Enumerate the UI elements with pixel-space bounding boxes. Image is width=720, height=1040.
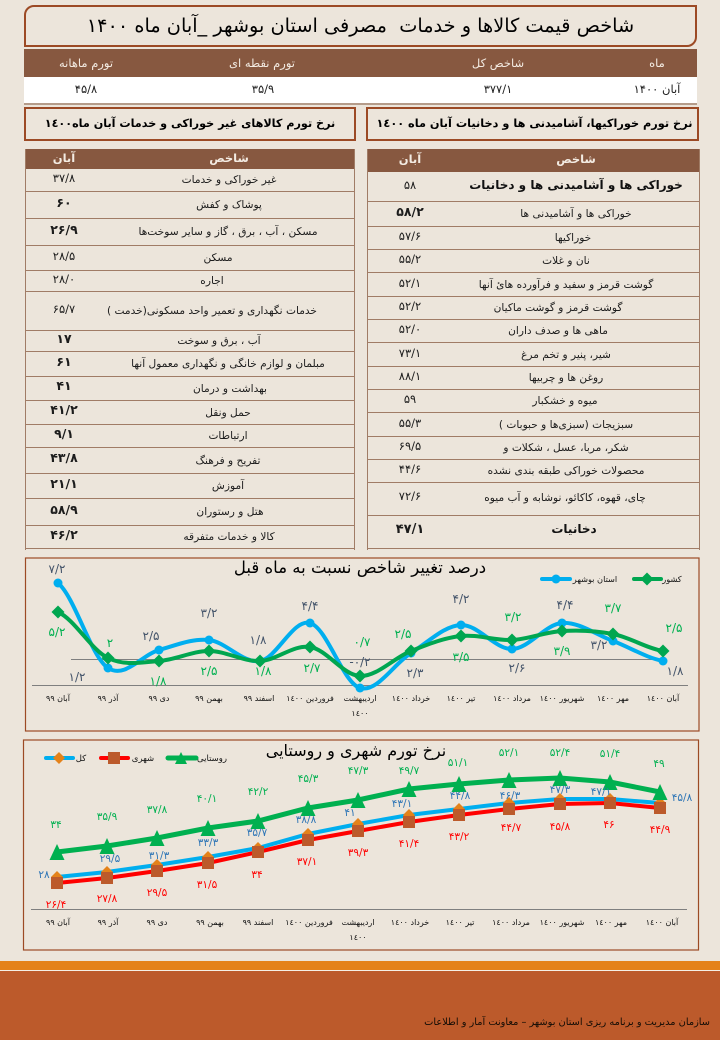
data labels: country: ۳/۲ — [505, 610, 521, 624]
row: محصولات خوراکی طبقه بندی نشده — [488, 465, 644, 477]
row: ۴۴/۶ — [399, 462, 421, 476]
row — [26, 499, 354, 526]
axis labels: chart 1: فروردین ۱٤۰۰ — [286, 694, 334, 703]
data labels: urban: ۴۳/۲ — [449, 831, 470, 843]
axis labels: chart 1: آذر ۹۹ — [98, 693, 119, 703]
row: مسکن — [203, 252, 233, 264]
data labels: country: ۳/۵ — [453, 650, 469, 664]
data labels: urban: ۳۱/۵ — [197, 879, 218, 891]
row — [368, 437, 699, 460]
data labels: country: ۲/۷ — [304, 661, 321, 675]
panel: summary table — [24, 49, 697, 105]
row — [26, 401, 354, 425]
summary table header: ماه — [649, 56, 665, 70]
row — [26, 526, 354, 549]
row — [368, 250, 699, 273]
data labels: total — [38, 784, 693, 881]
row — [26, 219, 354, 246]
series: country — [52, 606, 670, 682]
data labels: rural: ۵۲/۴ — [550, 747, 570, 759]
row: ماهی ها و صدف داران — [508, 325, 608, 337]
summary table values: ۴۵/۸ — [75, 82, 97, 96]
row: خدمات نگهداری و تعمیر واحد مسکونی(خدمت ) — [107, 305, 317, 317]
data labels: rural: ۳۷/۸ — [147, 804, 168, 816]
row: خوراکی ها و آشامیدنی ها و دخانیات — [469, 178, 683, 192]
row: ۵۲/۰ — [399, 322, 421, 336]
table header: شاخص — [556, 152, 596, 166]
row: ۵۸ — [404, 178, 416, 192]
row — [26, 271, 354, 292]
data labels: urban: ۴۴/۹ — [650, 824, 671, 836]
data labels: urban: ۳۹/۳ — [348, 847, 369, 859]
heading: non-food inflation — [24, 107, 356, 141]
row — [26, 192, 354, 219]
data labels: total: ۳۳/۳ — [198, 837, 219, 849]
summary table header — [24, 49, 697, 77]
row: ۶۵/۷ — [53, 302, 75, 316]
row: ۵۸/۹ — [50, 502, 78, 517]
row — [368, 390, 699, 413]
row: شیر، پنیر و تخم مرغ — [521, 349, 611, 361]
row — [368, 297, 699, 320]
row: ۲۸/۵ — [53, 249, 75, 263]
heading: food inflation — [366, 107, 699, 141]
axis labels: chart 1: دی ۹۹ — [149, 694, 170, 703]
axis labels: chart 2 — [46, 917, 679, 942]
axis labels: chart 1: شهریور ۱٤۰۰ — [540, 694, 585, 703]
legend: chart 2: روستایی — [197, 754, 227, 764]
row: ۴۱ — [56, 378, 72, 393]
summary table values — [75, 82, 681, 96]
markers: total — [51, 793, 666, 883]
row — [26, 246, 354, 271]
row: میوه و خشکبار — [532, 395, 598, 407]
row: ۶۹/۵ — [399, 439, 421, 453]
axis labels: chart 1: تیر ۱٤۰۰ — [447, 694, 475, 703]
axis labels: chart 1: مرداد ۱٤۰۰ — [493, 694, 531, 703]
data labels: Bushehr: ۴/۲ — [453, 592, 469, 606]
legend: chart 2 — [46, 752, 227, 764]
series: Bushehr province — [54, 578, 668, 692]
axis labels: chart 2: مرداد ۱٤۰۰ — [492, 918, 530, 927]
axis labels: chart 1: آبان ۹۹ — [46, 693, 71, 703]
data labels: country: ۲/۵ — [666, 621, 682, 635]
row: بهداشت و درمان — [193, 383, 267, 395]
row: خوراکیها — [555, 232, 591, 244]
title — [24, 5, 697, 47]
row: سبزیجات (سبزی‌ها و حبوبات ) — [499, 419, 633, 431]
data labels: country: ۱/۸ — [255, 664, 272, 678]
panel: non-food table — [25, 149, 355, 550]
table header: شاخص — [209, 151, 249, 165]
row — [368, 343, 699, 367]
row: ۶۱ — [56, 354, 72, 369]
data labels: total: ۴۷/۳ — [550, 784, 571, 796]
data labels: urban — [46, 819, 671, 911]
row — [26, 331, 354, 352]
legend: chart 1 — [542, 572, 682, 586]
axis labels: chart 1: آبان ۱٤۰۰ — [647, 693, 680, 703]
row: آموزش — [212, 480, 244, 492]
summary table values: ۳۷۷/۱ — [484, 82, 512, 96]
data labels: rural: ۴۹ — [653, 758, 665, 770]
summary table header: تورم ماهانه — [59, 56, 113, 70]
row: تفریح و فرهنگ — [196, 455, 260, 467]
summary table values: آبان ۱۴۰۰ — [634, 82, 680, 96]
axis labels: chart 2: آبان ۹۹ — [46, 917, 71, 927]
markers: urban — [51, 797, 666, 889]
axis labels: chart 2: بهمن ۹۹ — [196, 918, 224, 927]
row: روغن ها و چربیها — [529, 372, 603, 384]
row — [26, 292, 354, 331]
data labels: rural: ۳۵/۹ — [97, 811, 118, 823]
title: شاخص قیمت کالاها و خدمات مصرفی استان بوشهر _آبان ماه ۱۴۰۰ — [87, 14, 634, 37]
data labels: rural: ۵۲/۱ — [499, 747, 519, 759]
row: آب ، برق و سوخت — [177, 335, 261, 347]
data labels: total: ۳۱/۳ — [149, 850, 170, 862]
row: ۸۸/۱ — [399, 369, 421, 383]
data labels: urban: ۲۷/۸ — [97, 893, 118, 905]
data labels: Bushehr: ۷/۲ — [49, 562, 65, 576]
legend: chart 1: کشور — [661, 574, 682, 584]
summary table values: ۳۵/۹ — [252, 82, 274, 96]
axis labels: chart 1 — [46, 693, 680, 718]
data labels: country: ۲/۵ — [395, 627, 411, 641]
data labels: rural: ۴۲/۲ — [248, 786, 269, 798]
row — [26, 377, 354, 401]
data labels: urban: ۳۷/۱ — [297, 856, 317, 868]
row: ۷۳/۱ — [399, 346, 421, 360]
data labels: urban: ۴۶ — [603, 819, 615, 831]
row — [368, 227, 699, 250]
series: rural — [57, 778, 660, 852]
row: ۷۲/۶ — [399, 489, 421, 503]
data labels: rural: ۴۵/۳ — [298, 773, 319, 785]
data labels: Bushehr: ۴/۴ — [557, 598, 573, 612]
data labels: total: ۴۷/۱ — [591, 786, 611, 798]
row: ۹/۱ — [54, 426, 74, 441]
data labels: Bushehr: ۴/۴ — [302, 599, 318, 613]
table header: آبان — [399, 152, 421, 166]
row: ۵۸/۲ — [396, 204, 424, 219]
row: کالا و خدمات متفرقه — [183, 531, 275, 543]
row: ۴۳/۸ — [50, 450, 78, 465]
table header — [26, 149, 354, 169]
axis labels: chart 2: فروردین ۱٤۰۰ — [285, 918, 333, 927]
data labels: Bushehr: ۲/۶ — [509, 661, 525, 675]
row: ۵۲/۱ — [399, 276, 421, 290]
data labels: Bushehr: ۱/۸ — [250, 633, 267, 647]
data labels: country: ۲/۵ — [201, 664, 217, 678]
data labels: total: ۲۹/۵ — [100, 853, 121, 865]
row: شکر، مربا، عسل ، شکلات و — [503, 442, 629, 454]
heading: non-food inflation: نرخ تورم کالاهای غیر خوراکی و خدمات آبان ماه١٤٠٠ — [45, 117, 335, 130]
axis labels: chart 1: مهر ۱٤۰۰ — [597, 694, 629, 703]
data labels: urban: ۴۵/۸ — [550, 821, 571, 833]
row — [368, 413, 699, 437]
legend: chart 2: شهری — [132, 754, 154, 764]
footer accent bar — [0, 961, 720, 970]
data labels: rural: ۳۴ — [50, 819, 62, 831]
summary table header: تورم نقطه ای — [229, 56, 295, 70]
data labels: urban: ۴۱/۴ — [399, 838, 419, 850]
series: total — [57, 799, 660, 877]
data labels: urban: ۴۴/۷ — [501, 822, 522, 834]
axis labels: chart 1: ۱٤۰۰ — [351, 709, 369, 718]
data labels: Bushehr: ۲/۵ — [143, 629, 159, 643]
row: ۵۵/۲ — [399, 252, 421, 266]
row — [368, 516, 699, 549]
data labels: Bushehr: ۱/۸ — [667, 664, 684, 678]
data labels: total: ۴۱ — [344, 807, 356, 819]
data labels: rural: ۴۷/۳ — [348, 765, 369, 777]
row: اجاره — [200, 275, 224, 287]
row: ۵۷/۶ — [399, 229, 421, 243]
data labels: total: ۴۴/۸ — [450, 790, 471, 802]
table header — [368, 149, 699, 172]
data labels: country — [49, 601, 682, 688]
row: ۵۵/۳ — [399, 416, 421, 430]
data labels: urban: ۳۴ — [251, 869, 263, 881]
row — [368, 273, 699, 297]
row: ۳۷/۸ — [53, 171, 75, 185]
row — [368, 320, 699, 343]
data labels: rural: ۴۰/۱ — [197, 793, 217, 805]
axis labels: chart 2: اردیبهشت — [342, 918, 374, 927]
row: ارتباطات — [208, 430, 248, 442]
row: چای، قهوه، کاکائو، نوشابه و آب میوه — [484, 492, 646, 504]
data labels: country: ۳/۹ — [554, 644, 570, 658]
axis labels: chart 1: بهمن ۹۹ — [195, 694, 223, 703]
data labels: country: ۵/۲ — [49, 625, 65, 639]
chart title: نرخ تورم شهری و روستایی — [266, 741, 446, 761]
row: ۶۰ — [56, 195, 72, 210]
table header: آبان — [53, 151, 75, 165]
data labels: total: ۴۳/۱ — [392, 798, 412, 810]
data labels: urban: ۲۹/۵ — [147, 887, 168, 899]
axis labels: chart 1: اسفند ۹۹ — [244, 694, 274, 703]
data labels: Bushehr — [49, 562, 684, 684]
data labels: Bushehr: ۳/۲ — [201, 606, 217, 620]
row — [368, 460, 699, 483]
row — [368, 367, 699, 390]
row: ۴۷/۱ — [396, 522, 424, 537]
row: مبلمان و لوازم خانگی و نگهداری معمول آنها — [131, 358, 325, 370]
row — [26, 474, 354, 499]
row: خوراکی ها و آشامیدنی ها — [520, 208, 632, 220]
row — [368, 172, 699, 202]
data labels: total: ۳۵/۷ — [247, 827, 268, 839]
data labels: country: ۲ — [107, 636, 113, 650]
data labels: Bushehr: ۳/۲ — [591, 638, 607, 652]
data labels: total: ۴۶/۳ — [500, 790, 521, 802]
data labels: total: ۳۸/۸ — [296, 814, 317, 826]
data labels: rural: ۵۱/۴ — [600, 748, 620, 760]
data labels: country: ۰/۷ — [354, 635, 371, 649]
row: ۵۹ — [404, 392, 416, 406]
footer text: سازمان مدیریت و برنامه ریزی استان بوشهر – معاونت آمار و اطلاعات — [424, 1017, 710, 1028]
axis labels: chart 2: مهر ۱٤۰۰ — [595, 918, 627, 927]
chart: monthly index change — [24, 557, 700, 732]
panel: food table — [367, 149, 700, 550]
series: urban — [57, 803, 660, 883]
axis labels: chart 2: خرداد ۱٤۰۰ — [391, 918, 429, 927]
axis labels: chart 2: آبان ۱٤۰۰ — [646, 917, 679, 927]
heading: food inflation: نرخ تورم خوراکیها، آشامیدنی ها و دخانیات آبان ماه ١٤٠٠ — [377, 117, 692, 130]
data labels: country: ۱/۸ — [150, 674, 167, 688]
data labels: Bushehr: -۰/۲ — [349, 655, 371, 669]
row: دخانیات — [551, 522, 597, 536]
row: مسکن ، آب ، برق ، گاز و سایر سوخت‌ها — [138, 226, 318, 238]
row: ۵۲/۲ — [399, 299, 421, 313]
axis labels: chart 2: آذر ۹۹ — [98, 917, 119, 927]
axis labels: chart 2: دی ۹۹ — [147, 918, 168, 927]
row: ۴۱/۲ — [50, 402, 78, 417]
row: ۴۶/۲ — [50, 527, 78, 542]
row: نان و غلات — [542, 255, 590, 267]
row: پوشاک و کفش — [196, 199, 262, 211]
data labels: Bushehr: ۱/۲ — [69, 670, 85, 684]
row: حمل ونقل — [205, 407, 251, 419]
row — [26, 425, 354, 448]
row — [26, 352, 354, 377]
data labels: rural: ۴۹/۷ — [399, 765, 420, 777]
row — [368, 202, 699, 227]
data labels: total: ۴۵/۸ — [672, 792, 693, 804]
data labels: rural — [50, 747, 665, 831]
row: گوشت قرمز و گوشت ماکیان — [494, 302, 622, 314]
data labels: total: ۲۸ — [38, 869, 50, 881]
markers: rural — [50, 770, 668, 860]
data labels: country: ۳/۷ — [605, 601, 622, 615]
axis labels: chart 1: اردیبهشت — [344, 694, 376, 703]
axis labels: chart 2: اسفند ۹۹ — [243, 918, 273, 927]
row: ۲۱/۱ — [50, 476, 78, 491]
legend: chart 1: استان بوشهر — [572, 574, 617, 584]
chart title: درصد تغییر شاخص نسبت به ماه قبل — [234, 558, 486, 578]
data labels: urban: ۲۶/۴ — [46, 899, 66, 911]
axis labels: chart 1: خرداد ۱٤۰۰ — [392, 694, 430, 703]
row: ۲۶/۹ — [50, 222, 78, 237]
row — [26, 448, 354, 474]
row: هتل و رستوران — [196, 506, 264, 518]
row: غیر خوراکی و خدمات — [182, 174, 276, 186]
axis labels: chart 2: ۱٤۰۰ — [349, 933, 367, 942]
data labels: Bushehr: ۲/۳ — [407, 666, 424, 680]
summary table header: شاخص کل — [472, 56, 524, 70]
axis labels: chart 2: شهریور ۱٤۰۰ — [540, 918, 585, 927]
row: ۲۸/۰ — [53, 272, 75, 286]
row: گوشت قرمز و سفید و فرآورده هائ آنها — [479, 279, 653, 291]
footer band — [0, 961, 720, 1040]
data labels: rural: ۵۱/۱ — [448, 757, 468, 769]
row — [368, 483, 699, 516]
row: ۱۷ — [56, 331, 72, 346]
axis labels: chart 2: تیر ۱٤۰۰ — [446, 918, 474, 927]
row — [26, 169, 354, 192]
legend: chart 2: کل — [76, 754, 87, 764]
